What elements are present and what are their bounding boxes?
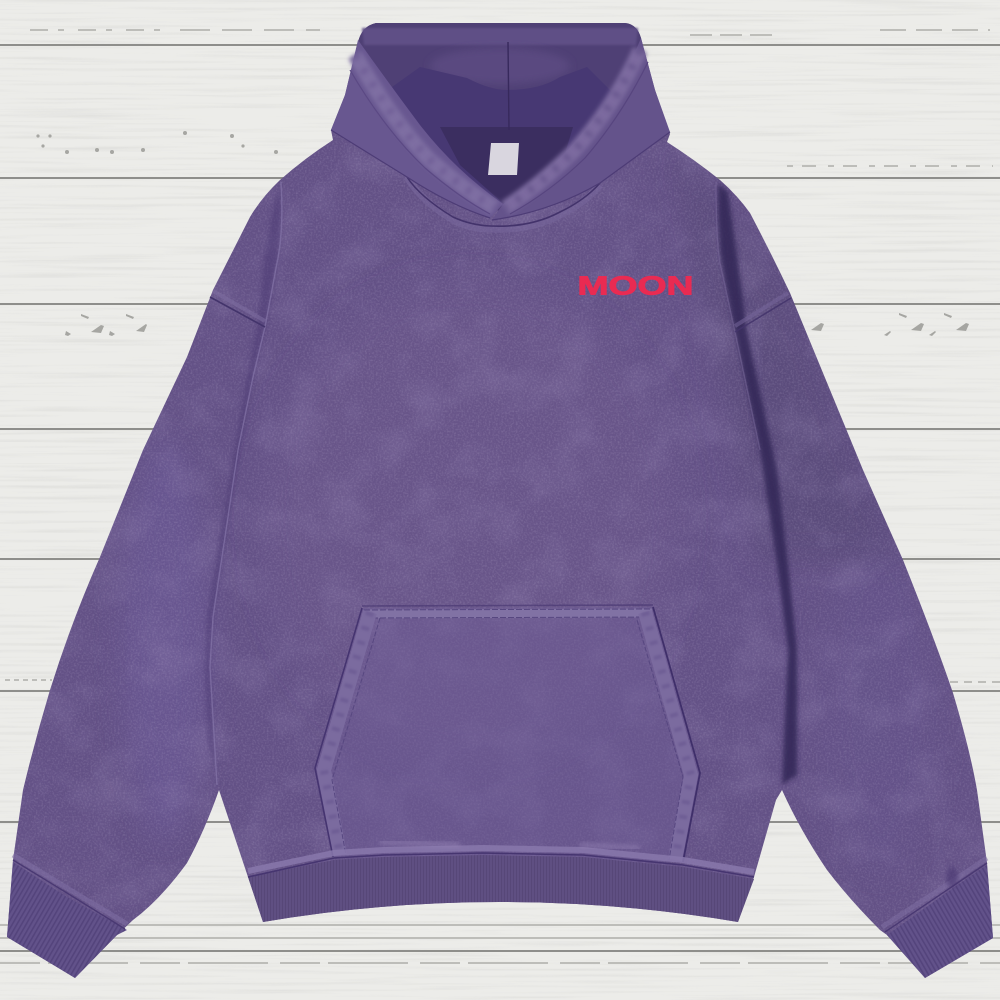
neckline collar seam	[407, 177, 600, 229]
right side seam highlight	[716, 182, 760, 450]
right cuff	[882, 858, 993, 978]
hood left flap	[331, 40, 503, 218]
right sleeve shadow fold	[718, 184, 797, 785]
bottom hem rib	[248, 842, 754, 922]
left sleeve shadow fold	[205, 184, 281, 770]
left cuff	[7, 855, 127, 978]
neck label	[488, 143, 519, 175]
left side seam highlight	[210, 182, 282, 785]
kangaroo pocket	[315, 605, 700, 862]
pocket right welt	[637, 607, 700, 862]
logo text: MOON: MOON	[578, 270, 694, 300]
right shoulder seam	[735, 293, 791, 332]
pocket top band	[362, 605, 653, 618]
hood interior	[358, 23, 641, 212]
pocket left welt	[315, 608, 380, 857]
hood right flap	[492, 38, 670, 220]
left shoulder seam	[210, 291, 265, 327]
